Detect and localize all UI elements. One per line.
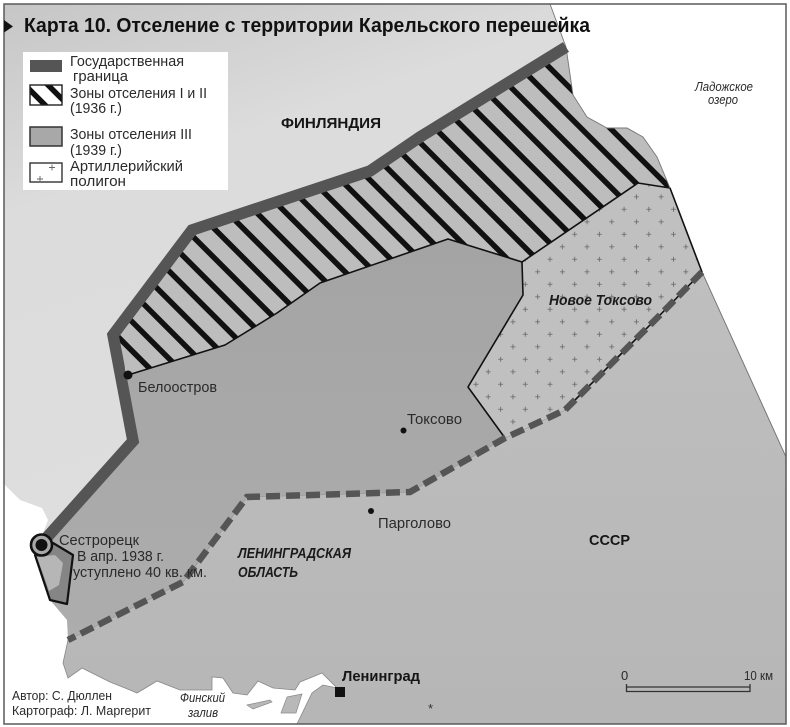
label: Finland: ФИНЛЯНДИЯ [281,115,381,132]
legend text: state border: граница [73,68,129,85]
legend swatch: zone III [30,127,62,146]
legend text: zones I and II: (1936 г.) [70,100,122,117]
place: Pargolovo: Парголово [378,515,451,532]
label: USSR: СССР [589,532,630,549]
credits [12,688,151,718]
label: Lake Ladoga: озеро [708,93,738,107]
legend swatch: artillery range [30,163,62,182]
label: Leningrad region: ОБЛАСТЬ [238,565,298,581]
callout: Sestroretsk [59,532,207,581]
callout: Sestroretsk: Сестрорецк [59,532,139,549]
lake coast lines [550,4,786,457]
legend text: artillery range [70,158,183,190]
place: Leningrad: Ленинград [342,668,420,685]
scale bar: 0 [621,668,628,683]
asterisk: * [428,701,433,716]
legend text: state border [70,53,184,85]
legend text: zones I and II [70,85,207,117]
legend text: zone III [70,126,192,159]
credits: Картограф: Л. Маргерит [12,703,151,718]
legend text: zone III: (1939 г.) [70,142,122,159]
callout: Sestroretsk: В апр. 1938 г. [77,548,164,565]
zone III (1939) [37,239,523,640]
label: Novoe Toksovo: Новое Токсово [549,293,652,309]
label: Lake Ladoga: Ладожское [694,80,753,94]
place: Leningrad [335,668,420,697]
legend text: artillery range: полигон [70,173,126,190]
Sestroretsk marker [31,534,52,556]
place: Pargolovo [368,508,451,532]
dashed internal border [68,272,702,640]
scale bar: 10 км [744,668,773,683]
legend text: artillery range: Артиллерийский [70,158,183,175]
legend swatch: state border [30,60,62,72]
state border [41,47,566,544]
zone outlines [128,183,702,438]
place: Beloostrov [124,370,217,396]
legend text: zones I and II: Зоны отселения I и II [70,85,207,102]
zones I and II hatched (1936) [119,54,670,373]
label: Gulf of Finland: Финский [180,691,225,705]
label: Gulf of Finland [180,691,225,720]
place: Toksovo [400,411,462,434]
legend [23,52,228,190]
territory: USSR [63,272,786,724]
label: Gulf of Finland: залив [187,706,218,720]
territory: Finland [4,4,566,544]
artillery range [468,183,702,438]
scale bar [621,668,773,692]
label: Leningrad region: ЛЕНИНГРАДСКАЯ [237,546,351,562]
ceded territory near Sestroretsk [35,543,73,604]
place: Toksovo: Токсово [407,411,462,428]
label: Lake Ladoga [694,80,753,107]
title: Карта 10. Отселение с территории Карельского перешейка [24,15,591,37]
credits: Автор: С. Дюллен [12,688,112,703]
label: Leningrad region [237,546,351,581]
islands in the Gulf of Finland [247,694,302,713]
legend swatch: zones I and II [29,84,63,106]
callout: Sestroretsk: уступлено 40 кв. км. [73,564,207,581]
legend text: state border: Государственная [70,53,184,70]
place: Beloostrov: Белоостров [138,379,217,396]
legend text: zone III: Зоны отселения III [70,126,192,143]
title marker [4,20,13,32]
